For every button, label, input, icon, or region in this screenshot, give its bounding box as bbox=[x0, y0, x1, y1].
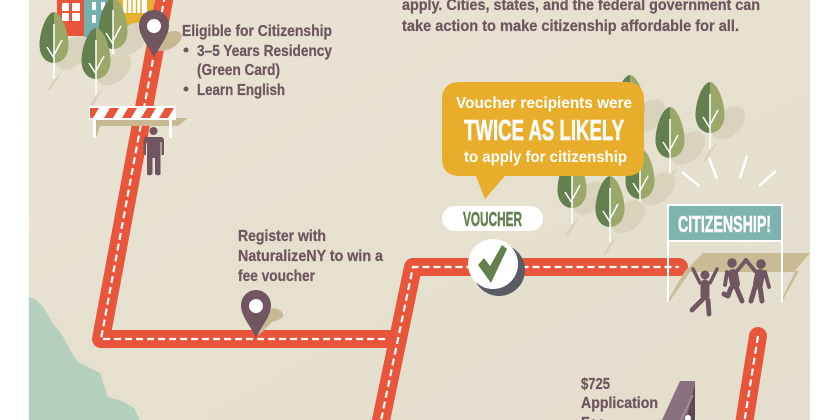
intro text bbox=[402, 0, 760, 35]
intro text: take action to make citizenship affordable for all. bbox=[402, 18, 739, 35]
person jumping bbox=[692, 269, 717, 314]
eligibility text: (Green Card) bbox=[197, 62, 280, 79]
citizenship banner: CITIZENSHIP! bbox=[678, 211, 771, 237]
callout: twice as likely: to apply for citizenship bbox=[464, 149, 627, 166]
registration text: NaturalizeNY to win a bbox=[238, 248, 383, 265]
road: eligibility to registration bbox=[101, 0, 397, 339]
road: voucher to citizenship bbox=[379, 267, 679, 420]
registration text: fee voucher bbox=[238, 268, 315, 285]
application fee text: $725 bbox=[581, 376, 610, 393]
voucher label bbox=[442, 206, 543, 231]
callout: twice as likely: TWICE AS LIKELY bbox=[464, 115, 624, 147]
application fee text bbox=[581, 376, 658, 420]
people high-fiving bbox=[724, 258, 769, 301]
road: final stretch bbox=[743, 336, 758, 420]
application fee text: Application bbox=[581, 395, 658, 412]
eligibility text: Eligible for Citizenship bbox=[182, 23, 332, 40]
icon: person at barrier bbox=[144, 127, 164, 175]
callout: twice as likely: Voucher recipients were bbox=[456, 95, 632, 112]
eligibility text: 3–5 Years Residency bbox=[197, 43, 332, 60]
coastline water bbox=[29, 297, 140, 420]
trees: town bbox=[40, 0, 155, 107]
voucher label: VOUCHER bbox=[463, 208, 522, 231]
icon: voucher check bbox=[468, 239, 525, 296]
registration text bbox=[238, 228, 383, 285]
eligibility text: Learn English bbox=[197, 82, 285, 99]
celebration rays bbox=[682, 156, 776, 186]
icon: celebrating people bbox=[692, 258, 769, 314]
icon: pin registration bbox=[241, 290, 283, 338]
banner shadow bbox=[667, 253, 810, 302]
icon: application fee barrier bbox=[662, 381, 695, 420]
icon: road barrier bbox=[89, 106, 188, 138]
citizenship banner bbox=[667, 204, 783, 302]
buildings bbox=[57, 0, 154, 37]
eligibility text bbox=[182, 23, 332, 99]
icon: pin eligibility bbox=[139, 10, 185, 58]
callout: twice as likely bbox=[442, 82, 644, 199]
registration text: Register with bbox=[238, 228, 326, 245]
trees: right group bbox=[558, 75, 752, 255]
